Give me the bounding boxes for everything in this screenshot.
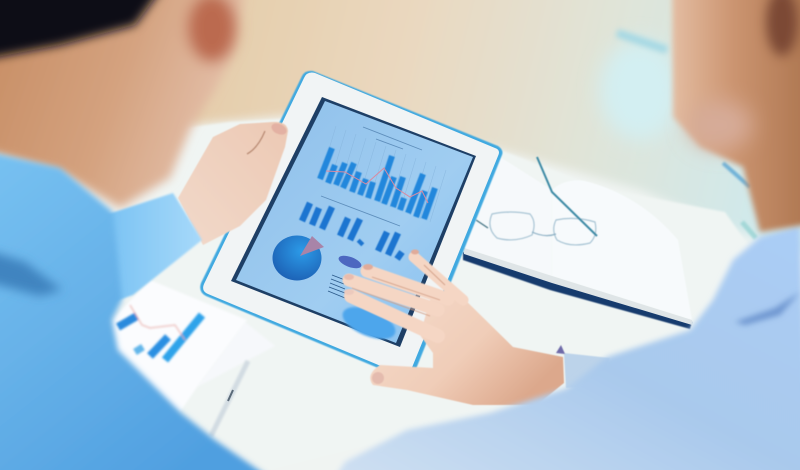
small bar charts [302, 203, 402, 259]
tablet white bezel [203, 73, 499, 375]
right shirt collar shadow [735, 292, 800, 325]
tablet screen [236, 101, 473, 343]
tablet [200, 71, 502, 379]
curved blue streak [723, 163, 750, 187]
finger separations [352, 265, 445, 316]
notebook page thickness [464, 248, 692, 325]
pie chart [272, 236, 324, 280]
tablet blue case edge [200, 71, 502, 379]
notebook left page [464, 155, 552, 276]
paper bars [118, 305, 202, 360]
screen blue blob [338, 300, 400, 346]
tablet screen bezel [231, 97, 476, 347]
right person's neck and face [672, 0, 800, 232]
shirt body [0, 150, 270, 470]
neck highlight [688, 101, 752, 149]
thumb crease [247, 131, 265, 154]
right hand on tablet [344, 250, 564, 405]
desk surface [140, 118, 748, 470]
notebook with glasses [463, 155, 692, 329]
left person's neck and head [0, 0, 245, 208]
shirt sleeve [105, 193, 202, 305]
lower paper sheet [197, 322, 275, 387]
hand body [370, 290, 564, 405]
upper paper sheet [110, 280, 247, 412]
pie highlighted slice [300, 236, 324, 256]
thumb nail [270, 121, 288, 137]
right shirt cuff stripes [556, 345, 610, 388]
chart title lines [321, 127, 422, 226]
grid behind bar chart [320, 126, 446, 222]
right person's shirt [335, 226, 800, 470]
printed chart paper [110, 280, 275, 436]
left person's shirt [0, 150, 270, 470]
notebook cover edge [463, 252, 692, 329]
cuff button [556, 345, 565, 354]
pen [211, 361, 248, 436]
left person's hand holding tablet [178, 121, 288, 245]
shirt collar shadow [0, 248, 62, 296]
legend text lines [328, 275, 345, 298]
fingers [349, 257, 463, 336]
small 3d pie [337, 253, 363, 271]
top bar chart [320, 148, 435, 219]
left person's hair [0, 0, 168, 60]
thumb and finger nails [344, 250, 419, 384]
icon: glasses [476, 157, 597, 245]
ear [188, 0, 236, 62]
teal streak [617, 33, 667, 50]
trend line on bar chart [326, 168, 428, 203]
notebook right page [552, 180, 692, 320]
paper trend line [130, 305, 185, 340]
ear [766, 0, 798, 56]
